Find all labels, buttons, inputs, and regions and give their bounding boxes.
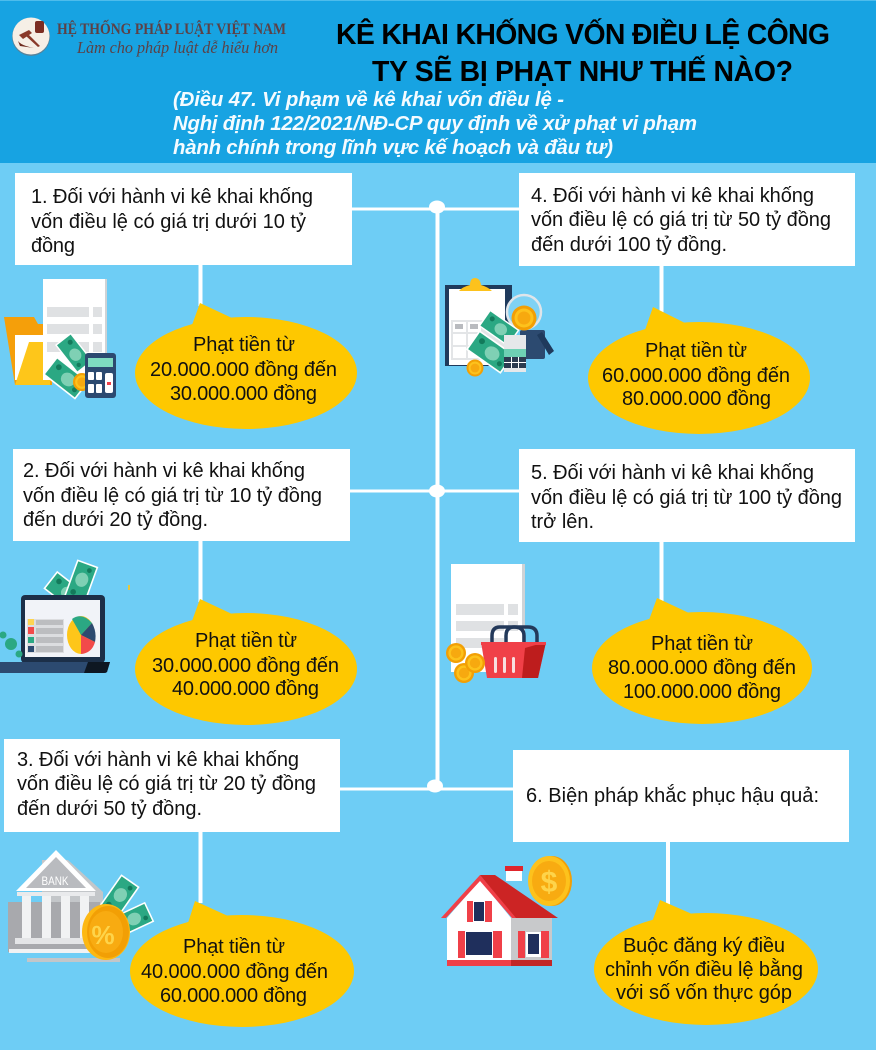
- callout 3: fine 40-60 million: Phạt tiền từ: [183, 936, 285, 958]
- panel 2: 10 to 20 billion: vốn điều lệ có giá trị từ 10 tỷ đồng: [23, 485, 322, 507]
- panel 3: 20 to 50 billion: 3. Đối với hành vi kê khai khống: [17, 749, 299, 771]
- callout 1: fine 20-30 million: 30.000.000 đồng: [170, 383, 317, 405]
- title: TY SẼ BỊ PHẠT NHƯ THẾ NÀO?: [372, 56, 793, 88]
- callout 4: fine 60-80 million: Phạt tiền từ: [645, 340, 747, 362]
- callout 2: fine 30-40 million: 40.000.000 đồng: [172, 678, 319, 700]
- callout 1: fine 20-30 million: [135, 303, 357, 429]
- callout 6: remedy measure: [594, 900, 818, 1025]
- panel 5: over 100 billion: vốn điều lệ có giá trị từ 100 tỷ đồng: [531, 487, 842, 509]
- callout 4: fine 60-80 million: 80.000.000 đồng: [622, 388, 771, 410]
- icon: bank with percent coin: BANK: [42, 874, 68, 888]
- icon: bank with percent coin: %: [91, 920, 115, 950]
- icon: bank with percent coin: [8, 850, 154, 962]
- callout 3: fine 40-60 million: 40.000.000 đồng đến: [141, 961, 328, 983]
- panel 5: over 100 billion: [519, 449, 855, 542]
- callout 5: fine 80-100 million: 100.000.000 đồng: [623, 681, 781, 703]
- callout 2: fine 30-40 million: 30.000.000 đồng đến: [152, 655, 339, 677]
- panel 4: 50 to 100 billion: [519, 173, 855, 266]
- callout 2: fine 30-40 million: [135, 599, 357, 725]
- panel 1: under 10 billion: đồng: [31, 235, 75, 257]
- icon: house with dollar coin: [441, 856, 572, 966]
- callout 2: fine 30-40 million: Phạt tiền từ: [195, 630, 297, 652]
- panel 2: 10 to 20 billion: [13, 449, 350, 541]
- panel 4: 50 to 100 billion: vốn điều lệ có giá trị từ 50 tỷ đồng: [531, 209, 831, 231]
- panel 3: 20 to 50 billion: [4, 739, 340, 832]
- icon: laptop with pie chart: [0, 559, 130, 673]
- callout 6: remedy measure: Buộc đăng ký điều: [623, 935, 785, 957]
- icon: folder, document, money and calculator: [4, 279, 116, 400]
- connector lines: [198, 200, 670, 905]
- header band: [0, 0, 876, 163]
- panel 3: 20 to 50 billion: vốn điều lệ có giá trị từ 20 tỷ đồng: [17, 773, 316, 795]
- panel 6: remedy: [513, 750, 849, 842]
- panel 1: under 10 billion: [15, 173, 352, 265]
- logo name: HỆ THỐNG PHÁP LUẬT VIỆT NAM: [57, 18, 286, 38]
- callout 4: fine 60-80 million: [588, 307, 810, 434]
- panel 1: under 10 billion: vốn điều lệ có giá trị dưới 10 tỷ: [31, 211, 306, 233]
- subtitle: Nghị định 122/2021/NĐ-CP quy định về xử phạt vi phạm: [173, 113, 697, 135]
- subtitle: hành chính trong lĩnh vực kế hoạch và đầu tư): [173, 137, 613, 159]
- title: KÊ KHAI KHỐNG VỐN ĐIỀU LỆ CÔNG: [336, 18, 830, 51]
- callout 3: fine 40-60 million: [130, 901, 354, 1027]
- panel 1: under 10 billion: 1. Đối với hành vi kê khai khống: [31, 186, 313, 208]
- panel 4: 50 to 100 billion: 4. Đối với hành vi kê khai khống: [531, 185, 814, 207]
- logo badge: [12, 18, 50, 56]
- callout 1: fine 20-30 million: Phạt tiền từ: [193, 334, 295, 356]
- logo slogan: Làm cho pháp luật dễ hiểu hơn: [76, 38, 278, 57]
- panel 2: 10 to 20 billion: đến dưới 20 tỷ đồng.: [23, 509, 208, 531]
- panel 5: over 100 billion: 5. Đối với hành vi kê khai khống: [531, 462, 814, 484]
- panel 6: remedy: 6. Biện pháp khắc phục hậu quả:: [526, 784, 819, 807]
- callout 5: fine 80-100 million: [592, 598, 812, 724]
- title: [336, 18, 830, 88]
- panel 3: 20 to 50 billion: đến dưới 50 tỷ đồng.: [17, 798, 202, 820]
- icon: house with dollar coin: $: [541, 866, 558, 899]
- callout 5: fine 80-100 million: Phạt tiền từ: [651, 633, 753, 655]
- callout 6: remedy measure: với số vốn thực góp: [616, 982, 792, 1004]
- panel 2: 10 to 20 billion: 2. Đối với hành vi kê khai khống: [23, 460, 305, 482]
- icon: receipt with shopping basket and coins: [446, 564, 546, 683]
- callout 1: fine 20-30 million: 20.000.000 đồng đến: [150, 359, 337, 381]
- panel 4: 50 to 100 billion: đến dưới 100 tỷ đồng.: [531, 234, 727, 256]
- subtitle: (Điều 47. Vi phạm về kê khai vốn điều lệ -: [173, 89, 564, 111]
- callout 5: fine 80-100 million: 80.000.000 đồng đến: [608, 657, 796, 679]
- callout 3: fine 40-60 million: 60.000.000 đồng: [160, 985, 307, 1007]
- panel 5: over 100 billion: trở lên.: [531, 511, 594, 533]
- callout 6: remedy measure: chỉnh vốn điều lệ bằng: [605, 958, 803, 981]
- subtitle: [173, 89, 697, 159]
- icon: clipboard with magnifier and money: [445, 278, 554, 376]
- callout 4: fine 60-80 million: 60.000.000 đồng đến: [602, 365, 790, 387]
